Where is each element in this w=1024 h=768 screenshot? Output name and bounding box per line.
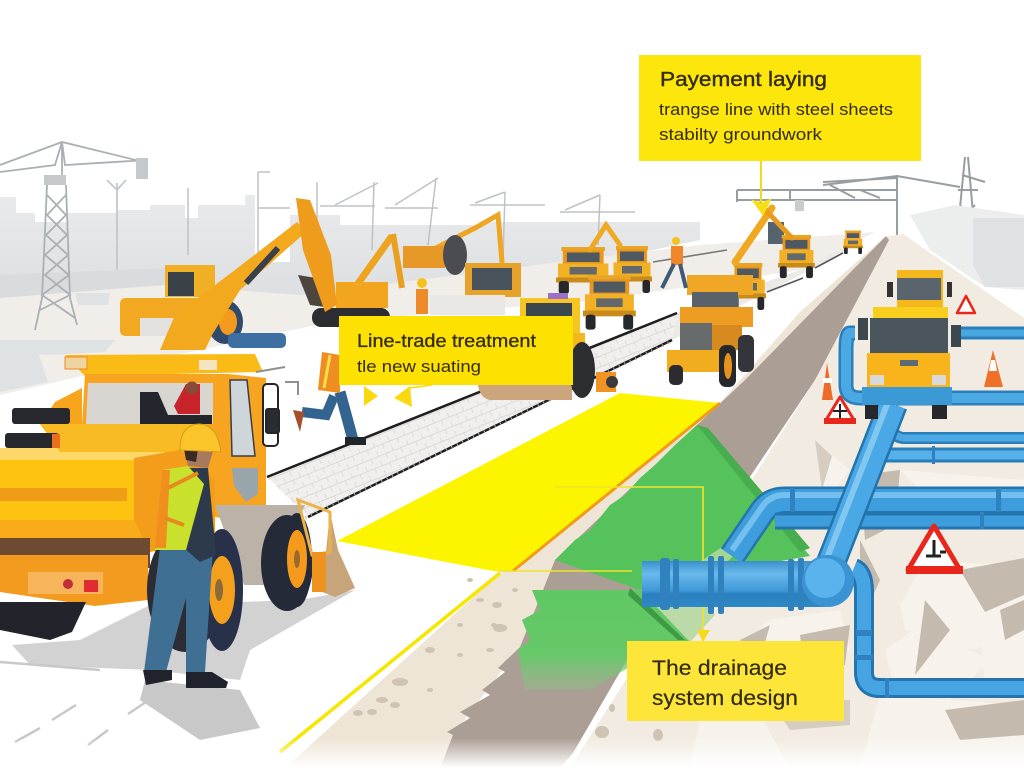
hood top [0,448,165,472]
hood deck [40,424,220,452]
cab roof [65,354,263,376]
track [0,602,86,640]
small worker centre [416,278,428,314]
rear arm [40,388,82,430]
pipe flanges [660,446,1001,698]
road dashes [0,662,146,745]
label box: drainage system: system design [652,687,798,710]
side mirror [256,367,298,446]
road shadows [12,590,355,740]
foreground worker [143,424,228,688]
warning sign small centre [824,397,856,424]
legs [144,548,213,672]
pavement connector arrow [751,161,772,216]
chassis bumper [0,555,148,606]
label box: line-trade treatment: Line-trade treatment [357,331,536,351]
rear wheel [261,513,313,611]
boots [143,670,228,688]
lateral pipes [732,495,1024,556]
beige left shoulder [285,236,886,768]
bottom fade [0,738,1024,768]
safety vest [155,466,204,550]
side body [134,450,215,552]
tower crane left [0,142,148,330]
rail lines [267,250,843,520]
hazy ground [0,232,875,395]
far trucks on road [556,222,863,330]
green drainage slope [518,425,810,690]
gantry and pylon right [737,157,985,263]
road roller [478,293,618,400]
branch pipes y437 y455 [885,428,1024,455]
right yellow truck [858,270,961,419]
second excavator [298,234,402,327]
running worker [293,352,366,445]
distant low wall [0,268,165,300]
label box: pavement laying: stabilty groundwork [659,126,823,144]
yellow surface [337,393,720,571]
upper right pipes [846,333,1024,398]
orange stripe [0,488,127,501]
orange edge [513,403,720,571]
label box: line-trade treatment: tle new suating [357,357,481,376]
main horizontal pipe [642,561,825,607]
hard hat [180,424,221,452]
distant city skyline [0,195,700,300]
lower panel [0,520,150,552]
grey embankment [440,236,889,768]
blue pipe network [642,333,1024,688]
right distant buildings [910,205,1024,290]
jacket [178,468,216,562]
near yellow loader [0,354,355,652]
cab frame [82,374,266,522]
roof lights [65,357,217,370]
yellow edge line [280,573,500,752]
label box: drainage system [627,641,844,721]
track gravel bed [267,313,677,517]
label box: drainage system: The drainage [652,657,787,680]
bucket [322,512,355,597]
bucket arm [298,500,330,555]
front wheel [147,528,243,652]
distant street lamps and cranes [188,172,635,262]
riser pipe [820,402,893,578]
traffic cones [822,350,1003,400]
mid excavator and truck [403,235,521,315]
windshield [86,383,213,424]
far excavator arms [432,204,792,262]
side window [230,380,255,456]
dark chassis [0,538,150,568]
large excavator [120,198,337,350]
far worker [662,237,686,288]
grey rear body [215,505,305,585]
drainage connector line [498,487,703,632]
label box: pavement laying [639,55,921,161]
front dump truck [667,275,754,387]
label box: line-trade treatment [339,316,573,385]
shoulder pebbles [353,578,663,741]
warning sign large [906,526,963,574]
label box: pavement laying: trangse line with steel sheets [659,101,893,119]
far track bed [672,248,850,340]
far right beige ground [570,234,1024,768]
lower pipe [854,568,1024,688]
side panel [0,460,134,522]
rock shadows [740,440,1024,740]
head [184,448,214,468]
drainage arrow head [697,630,710,642]
rock blocks [690,440,1024,768]
seat and driver [140,382,212,424]
lower door window [232,468,258,502]
front grille [5,408,70,448]
warning sign far [957,296,975,313]
concrete slabs left [0,293,115,392]
red lights [28,572,103,594]
label box: pavement laying: Payement laying [660,69,827,91]
treatment arrows [364,385,432,407]
